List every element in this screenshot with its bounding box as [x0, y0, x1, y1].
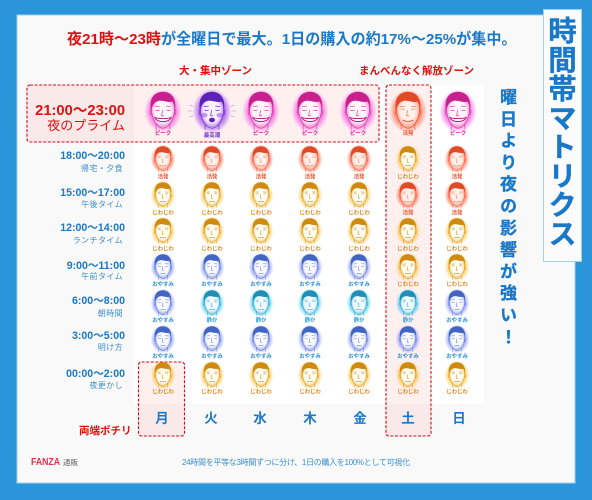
row of faces: 21-23 — [144, 88, 477, 139]
callout: both ends: 両端ポチリ — [79, 424, 132, 437]
row of faces: 3-5: おやすみ — [152, 352, 174, 360]
weekday labels: 水 — [253, 411, 267, 426]
time label: 15-17: 15:00〜17:00 — [60, 187, 125, 199]
row of faces: 3-5: おやすみ — [348, 352, 370, 360]
row of faces: 0-2: じわじわ — [446, 388, 468, 396]
time label: prime time: 21:00〜23:00 — [35, 103, 125, 119]
time label: 9-11 — [67, 260, 125, 281]
row of faces: 12-14 — [150, 216, 470, 252]
weekday labels: 金 — [353, 410, 367, 426]
row of faces: 6-8: 静か — [207, 316, 218, 324]
row of faces: 6-8: 静か — [354, 316, 365, 324]
time label: 6-8: 6:00〜8:00 — [72, 295, 125, 307]
weekday labels: 木 — [303, 410, 317, 426]
title box — [544, 10, 582, 262]
row of faces: 0-2: じわじわ — [348, 388, 370, 396]
row of faces: 6-8: 静か — [256, 316, 267, 324]
row of faces: 0-2: じわじわ — [152, 388, 174, 396]
row of faces: 21-23: ピーク — [155, 129, 171, 137]
logo: FANZA: 通販 — [63, 457, 78, 467]
time label: 6-8: 朝時間 — [98, 309, 123, 318]
row of faces: 18-20 — [150, 144, 470, 180]
row of faces: 9-11 — [150, 252, 470, 288]
time label: 18-20: 18:00〜20:00 — [60, 150, 125, 162]
row of faces: 0-2: じわじわ — [201, 388, 223, 396]
weekday labels: 土 — [401, 411, 415, 426]
row of faces: 18-20: 活発 — [256, 172, 267, 180]
row of faces: 18-20: 活発 — [207, 172, 218, 180]
row of faces: 6-8 — [150, 288, 470, 324]
row of faces: 0-2 — [150, 360, 470, 396]
row of faces: 15-17: 活発 — [403, 208, 414, 216]
time label: 18-20 — [60, 150, 125, 173]
row of faces: 15-17: 活発 — [452, 208, 463, 216]
vertical message: 曜日より夜の影響が強い！ — [497, 88, 516, 350]
row of faces: 18-20: 活発 — [354, 172, 365, 180]
time label: 18-20: 帰宅・夕食 — [81, 163, 123, 173]
row of faces: 21-23: 最高潮 — [204, 131, 221, 139]
weekday labels: 日 — [452, 411, 466, 426]
row of faces: 6-8: おやすみ — [152, 316, 174, 324]
row of faces: 21-23: ピーク — [253, 129, 269, 137]
row of faces: 15-17: じわじわ — [152, 210, 174, 216]
row of faces: 9-11: おやすみ — [348, 280, 370, 288]
row of faces: 9-11: おやすみ — [299, 280, 321, 288]
row of faces: 6-8: おやすみ — [446, 316, 468, 324]
zone label: concentrated: 大・集中ゾーン — [179, 64, 252, 77]
row of faces: 12-14: じわじわ — [348, 246, 370, 252]
row of faces: 18-20: じわじわ — [397, 174, 419, 180]
row of faces: 3-5: おやすみ — [250, 352, 272, 360]
row of faces: 21-23: 活発 — [403, 129, 414, 137]
time label: prime time: 夜のプライム — [47, 118, 125, 133]
highlight zone: prime time row — [27, 85, 379, 142]
time label: 12-14: 12:00〜14:00 — [60, 222, 125, 234]
weekday labels: 火 — [204, 411, 218, 426]
time label: 3-5: 3:00〜5:00 — [72, 330, 125, 342]
highlight zone: Saturday column — [386, 85, 431, 436]
time label: 6-8 — [72, 295, 125, 318]
row of faces: 9-11: おやすみ — [152, 280, 174, 288]
row of faces: 15-17: じわじわ — [201, 210, 223, 216]
time label: 0-2: 00:00〜2:00 — [66, 368, 125, 380]
weekday labels: 月 — [155, 411, 169, 426]
vertical title: 時間帯マトリクス — [544, 16, 576, 248]
time label: 9-11: 9:00〜11:00 — [67, 260, 125, 272]
row of faces: 3-5 — [150, 324, 470, 360]
row of faces: 9-11: じわじわ — [397, 281, 419, 288]
row of faces: 18-20: 活発 — [158, 172, 169, 180]
time label: 3-5 — [72, 330, 125, 352]
row of faces: 12-14: じわじわ — [446, 246, 468, 252]
row of faces: 0-2: じわじわ — [299, 388, 321, 396]
row of faces: 3-5: おやすみ — [397, 352, 419, 360]
time label: 12-14: ランチタイム — [73, 236, 123, 245]
time label: 9-11: 午前タイム — [81, 271, 123, 281]
time label: prime time — [35, 103, 125, 133]
row of faces: 9-11: おやすみ — [250, 280, 272, 288]
row of faces: 0-2: じわじわ — [250, 388, 272, 396]
time label: 0-2: 夜更かし — [89, 381, 123, 390]
row of faces: 18-20: 活発 — [452, 172, 463, 180]
zone label: open weekend: まんべんなく解放ゾーン — [359, 64, 474, 77]
row of faces: 15-17: じわじわ — [299, 210, 321, 216]
row of faces: 0-2: じわじわ — [397, 388, 419, 396]
footnote: 24時間を平等な3時間ずつに分け、1日の購入を100%として可視化 — [182, 457, 410, 467]
row of faces: 12-14: じわじわ — [201, 246, 223, 252]
row of faces: 6-8: 静か — [403, 316, 414, 324]
row of faces: 6-8: 静か — [305, 316, 316, 324]
row of faces: 3-5: おやすみ — [201, 352, 223, 360]
weekday labels — [155, 410, 466, 426]
time label: 3-5: 明け方 — [98, 342, 123, 352]
headline: 夜21時〜23時が全曜日で最大。1日の購入の約17%〜25%が集中。 — [67, 30, 517, 48]
row of faces: 15-17: じわじわ — [250, 210, 272, 216]
time label: 15-17 — [60, 187, 125, 209]
row of faces: 12-14: じわじわ — [152, 246, 174, 252]
logo: FANZA: FANZA — [31, 457, 60, 468]
time label: 15-17: 午後タイム — [81, 199, 123, 209]
row of faces: 21-23: ピーク — [450, 129, 466, 137]
row of faces: 3-5: おやすみ — [446, 352, 468, 360]
row of faces: 18-20: 活発 — [305, 172, 316, 180]
row of faces: 12-14: じわじわ — [250, 246, 272, 252]
row of faces: 15-17: じわじわ — [348, 210, 370, 216]
row of faces: 9-11: おやすみ — [201, 280, 223, 288]
row of faces: 9-11: じわじわ — [446, 281, 468, 288]
time label: 12-14 — [60, 222, 125, 245]
highlight zone: Monday midnight cell — [138, 362, 184, 436]
white matrix area — [134, 85, 484, 404]
row of faces: 3-5: おやすみ — [299, 352, 321, 360]
row of faces: 12-14: じわじわ — [299, 246, 321, 252]
row of faces: 21-23: ピーク — [302, 129, 318, 137]
row of faces: 15-17 — [150, 180, 470, 216]
time label: 0-2 — [66, 368, 125, 390]
row of faces: 12-14: じわじわ — [397, 246, 419, 252]
row of faces: 21-23: ピーク — [350, 129, 366, 137]
